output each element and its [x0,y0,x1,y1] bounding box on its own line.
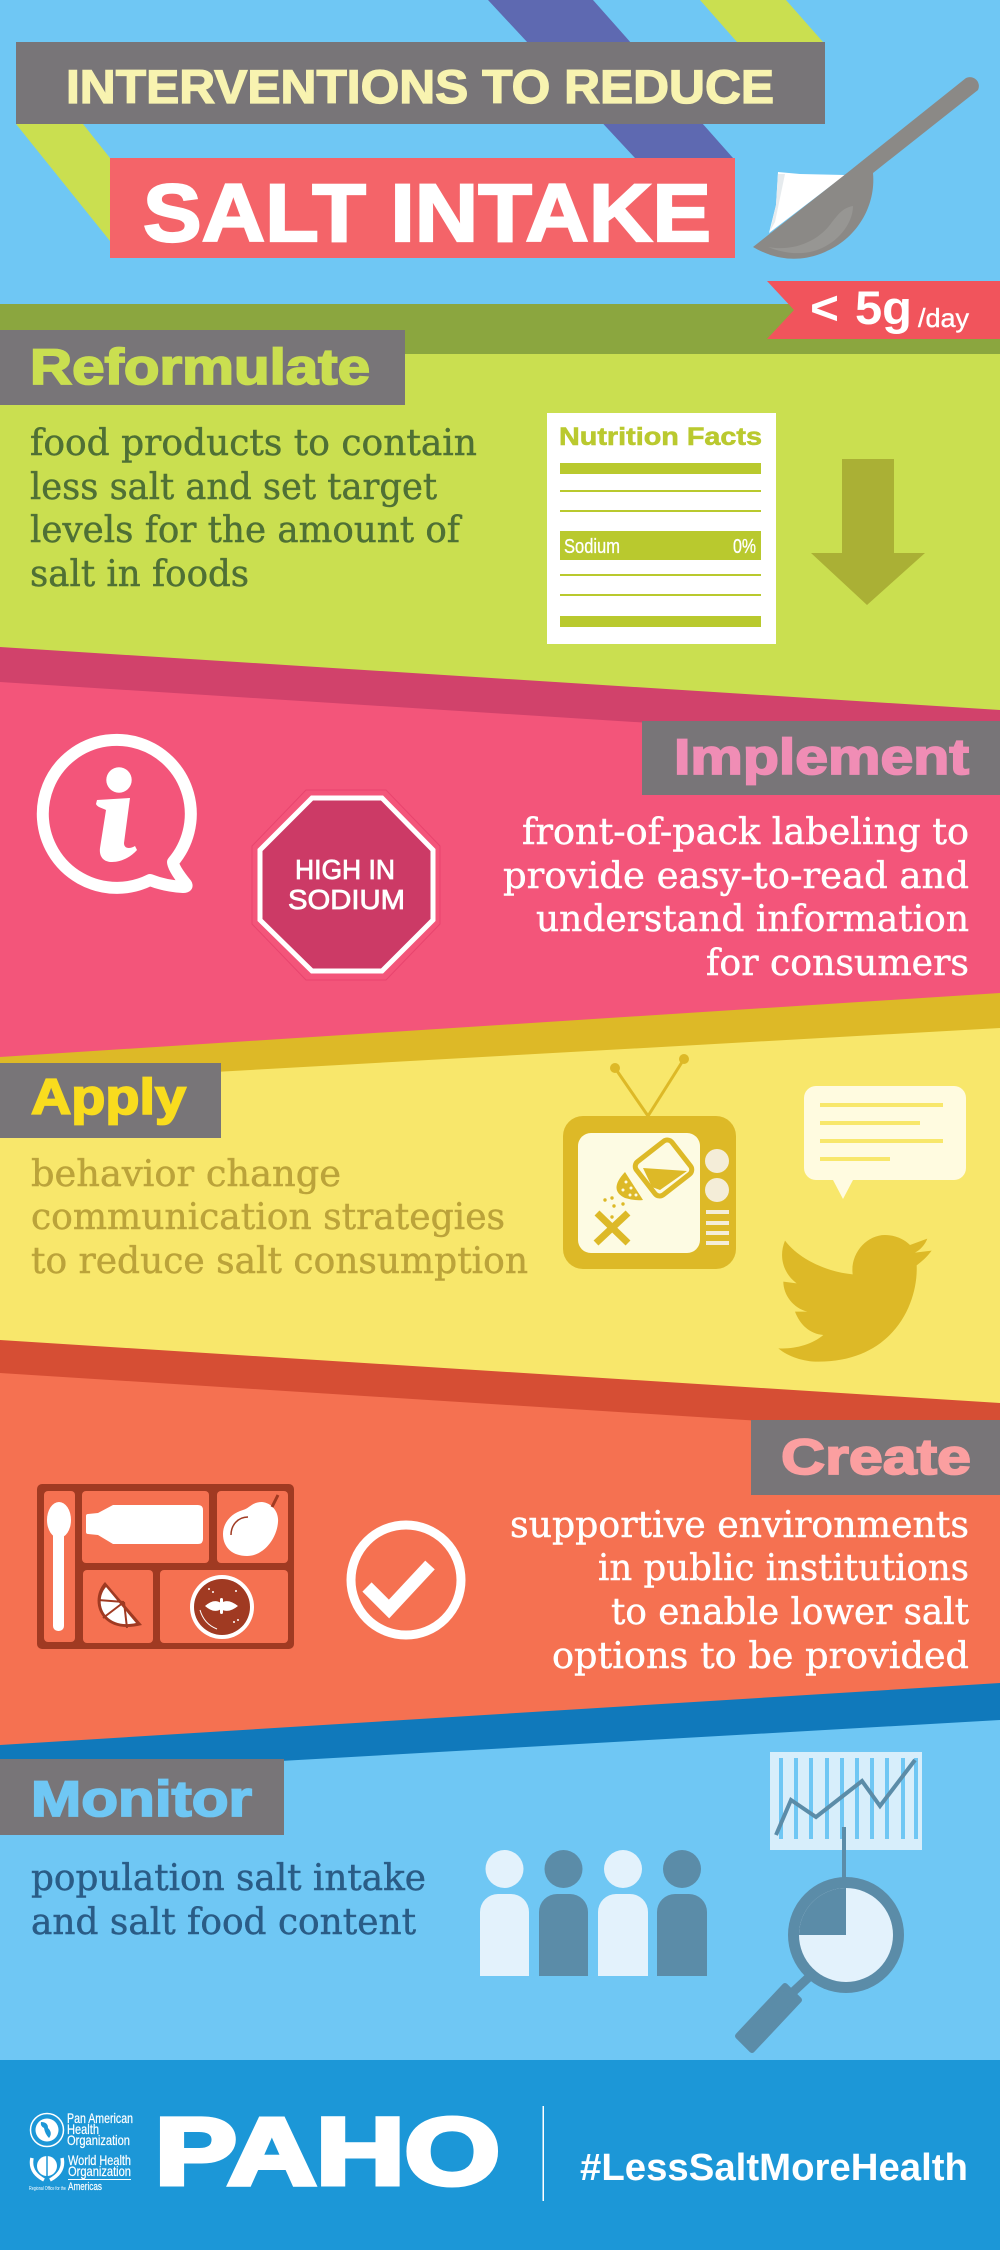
dark orange stripe [0,1340,1000,1450]
heading: reformulate: Reformulate [30,339,370,395]
text: create body: options to be provided [552,1636,969,1677]
text: reformulate body: less salt and set target [30,467,438,508]
icon: spoon with salt [753,77,979,259]
icon: television with salt shaker [563,1054,736,1269]
panel: footer [0,2060,1000,2250]
title banner top [16,42,825,124]
icon: magnifying glass with pie [738,1877,904,2050]
text: organization names: Regional Office for the [29,2186,66,2192]
title banner main: SALT INTAKE [143,168,711,259]
icon: nutrition facts label: 0% [733,536,756,558]
heading: apply: Apply [31,1069,186,1125]
lime ribbon left [16,124,110,241]
icon: twitter bird [778,1235,932,1362]
icon: nutrition facts label: Nutrition Facts [559,423,762,451]
icon: down arrow [811,459,925,605]
title banner top: INTERVENTIONS TO REDUCE [66,60,774,113]
text: reformulate body: salt in foods [30,554,249,595]
text: hashtag: #LessSaltMoreHealth [580,2147,968,2189]
text: implement body: front-of-pack labeling to [522,812,969,853]
light blue background [0,1720,1000,2060]
pink background [0,682,1000,1070]
text: apply body [31,1154,528,1282]
callout: less than 5g per day [767,281,1000,339]
text: implement body [503,812,969,984]
icon: PAHO emblem [30,2114,64,2146]
text: apply body: to reduce salt consumption [31,1241,528,1282]
heading: implement [642,721,1000,795]
callout: less than 5g per day: 5g [855,281,912,334]
text: organization names: Americas [68,2181,102,2193]
text: organization names: World Health [68,2152,131,2168]
text: monitor body: and salt food content [31,1902,417,1943]
text: implement body: understand information [536,899,969,940]
text: organization names [29,2110,133,2193]
heading: monitor [0,1759,284,1835]
text: create body: to enable lower salt [611,1592,970,1633]
panel: reformulate [0,330,1000,720]
icon: WHO emblem [32,2152,62,2180]
chart: line chart [770,1752,922,1879]
text: organization names: Organization [68,2163,131,2179]
panel: create [0,1340,1000,1750]
callout: less than 5g per day: < [810,281,839,334]
text: create body [510,1505,970,1677]
icon: people [480,1850,707,1976]
text: create body: supportive environments [510,1505,969,1546]
dark blue stripe [0,1683,1000,1790]
heading: create: Create [781,1429,971,1485]
text: reformulate body [30,423,477,595]
lime ribbon top [700,0,823,60]
heading: implement: Implement [674,729,969,785]
heading: create [751,1420,1000,1495]
text: monitor body [31,1858,426,1943]
panel: apply [0,993,1000,1420]
text: organization names: Organization [67,2132,130,2148]
text: apply body: communication strategies [31,1197,505,1238]
icon: check mark [351,1525,461,1635]
icon: info speech bubble [43,740,191,888]
orange background [0,1373,1000,1750]
icon: high in sodium stop sign: HIGH IN [295,854,395,885]
callout: less than 5g per day: /day [918,303,969,333]
icon: nutrition facts label: Sodium [564,536,620,558]
dark pink stripe [0,647,1000,760]
text: organization names: Pan American [67,2110,133,2126]
icon: high in sodium stop sign: SODIUM [288,884,405,915]
dark green stripe [0,304,1000,354]
text: monitor body: population salt intake [31,1858,426,1899]
text: reformulate body: levels for the amount of [30,510,463,551]
panel: implement [0,647,1000,1070]
heading: reformulate [0,330,405,405]
text: reformulate body: food products to contain [30,423,477,464]
text: apply body: behavior change [31,1154,341,1195]
heading: monitor: Monitor [31,1771,252,1827]
icon: speech bubble [804,1086,966,1199]
icon: nutrition facts label [547,413,776,644]
gold stripe [0,993,1000,1120]
text: organization names: Health [67,2121,99,2137]
panel: header [0,0,1000,354]
panel: monitor [0,1683,1000,2060]
yellow background [0,1028,1000,1420]
lime background [0,354,1000,720]
purple ribbon [488,0,733,200]
text: implement body: provide easy-to-read and [503,856,969,897]
text: implement body: for consumers [706,943,969,984]
icon: food tray [37,1484,294,1649]
text: create body: in public institutions [598,1548,969,1589]
heading: apply [0,1063,221,1138]
logo: PAHO wordmark: PAHO [155,2099,500,2205]
icon: high in sodium stop sign [252,790,440,980]
